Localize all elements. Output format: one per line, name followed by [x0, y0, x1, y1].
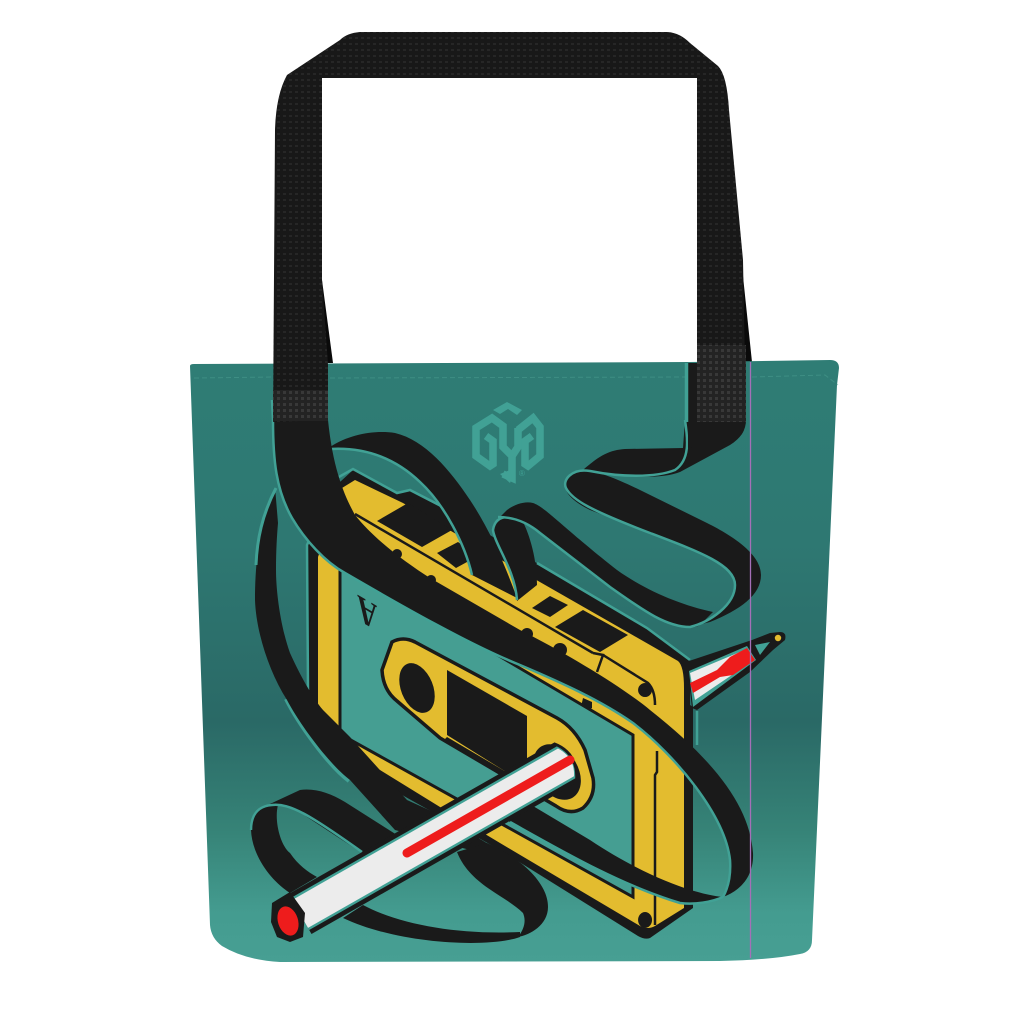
logo mark — [476, 402, 540, 483]
tape ribbon: crescent returning to the right — [495, 806, 723, 904]
purple seam line — [750, 362, 752, 958]
tape ribbon: left sweeping band — [255, 487, 490, 850]
cassette front face — [340, 562, 633, 897]
side A letter: A — [357, 586, 377, 640]
pen red end — [274, 904, 302, 938]
pen tip emerging from cassette — [683, 632, 785, 710]
tape ribbon edge at right strap — [685, 363, 688, 422]
pen socket — [523, 735, 591, 809]
cassette top windows — [377, 503, 628, 652]
cassette black window — [447, 670, 527, 785]
cassette top seam lines — [355, 514, 655, 705]
tape ribbon: small inner band — [493, 517, 537, 601]
pen body — [271, 742, 578, 942]
bag body — [190, 360, 839, 962]
pen end cap — [271, 892, 305, 942]
tote bag handles — [273, 32, 746, 422]
bag top stitching — [194, 375, 838, 385]
cassette teal outline — [307, 469, 697, 745]
tape ribbon: lower curved tail — [457, 843, 548, 937]
black backing behind right strap — [688, 363, 745, 448]
registered mark: ® — [519, 469, 525, 478]
back strap of handle — [322, 200, 752, 363]
tape ribbon: large band from left strap — [272, 400, 753, 897]
tape ribbon: right S curve — [498, 420, 761, 627]
cassette tape — [307, 469, 697, 939]
right strap stitched end — [697, 345, 746, 422]
tape ribbon: upper loop — [330, 432, 517, 598]
cassette screw holes — [638, 683, 652, 928]
tape ribbon: lower left loop — [251, 790, 397, 893]
yellow strip under window — [444, 737, 530, 792]
cassette black outline body — [307, 470, 693, 939]
tape ribbon: bottom crescent — [343, 905, 520, 943]
cassette reel hole — [392, 658, 442, 718]
cassette right seam — [655, 751, 657, 925]
cassette notches — [392, 549, 592, 712]
cassette label yellow panel — [382, 639, 594, 812]
cassette yellow shell — [318, 480, 684, 928]
left strap stitched end — [273, 390, 328, 421]
